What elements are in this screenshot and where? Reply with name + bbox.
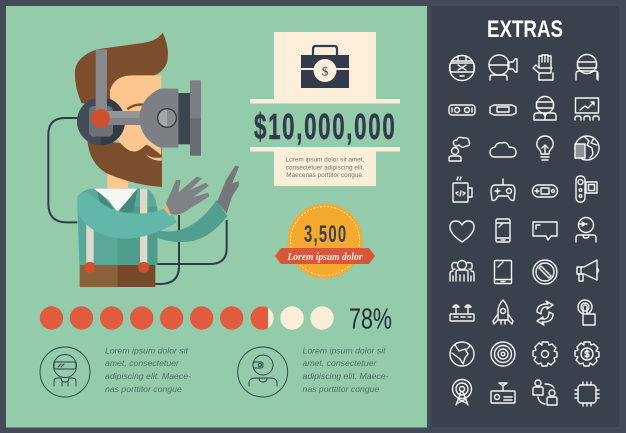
badge: 3,500 bbox=[275, 204, 375, 278]
icon: globe bbox=[450, 342, 474, 366]
badge: 3,500: Lorem ipsum dolor bbox=[287, 251, 363, 263]
icon: wifi router bbox=[450, 305, 474, 321]
icon: speech bubble bbox=[533, 222, 557, 240]
text block right: nas porttitor congue bbox=[302, 384, 379, 394]
headset strap bbox=[96, 49, 107, 116]
far glove bbox=[217, 166, 239, 213]
icon: vr head front bbox=[450, 56, 474, 80]
visor body bbox=[139, 89, 178, 148]
cream panel top bbox=[274, 32, 376, 99]
icon: person with side visor bbox=[576, 218, 596, 242]
cables bbox=[48, 118, 227, 284]
illustration: man wearing VR headset bbox=[48, 33, 239, 287]
trousers bbox=[80, 265, 117, 287]
icon: handheld console bbox=[532, 185, 558, 197]
icon: person with VR visor, side bbox=[238, 347, 288, 397]
icon: person thinking cloud bbox=[449, 137, 470, 161]
icon: visor wide bbox=[490, 105, 516, 115]
icon: globe with document bbox=[575, 136, 599, 160]
icon: game controller bbox=[491, 179, 515, 200]
heading: extras: EXTRAS bbox=[487, 16, 563, 43]
icon: person with headset bbox=[576, 54, 598, 80]
big number: $10,000,000 bbox=[254, 108, 395, 147]
percentage: 78% bbox=[349, 304, 392, 336]
caption: Maecenas porttitor congue. bbox=[286, 172, 364, 179]
shirt collar bbox=[94, 189, 137, 212]
progress dots: 78% bbox=[40, 306, 334, 330]
caption: Lorem ipsum dolor sit amet, bbox=[286, 156, 365, 164]
cream panel bottom bbox=[274, 151, 376, 186]
icon: camcorder bbox=[576, 176, 597, 202]
icon: presentation chart bbox=[575, 98, 599, 120]
icon: tablet bbox=[494, 260, 512, 284]
text block left: amet, consectetuer bbox=[105, 358, 180, 368]
arm of headset bbox=[107, 111, 143, 125]
near arm bbox=[77, 192, 177, 239]
icon: vr glove bbox=[533, 55, 553, 80]
icon: transmitter device bbox=[491, 383, 515, 403]
icon: light bulb bbox=[537, 136, 553, 160]
face bbox=[110, 75, 161, 155]
icon: touch hand bbox=[578, 300, 595, 325]
text block left: adipiscing elit. Maece- bbox=[105, 371, 191, 381]
icon: vr head side bbox=[489, 55, 517, 80]
far arm bbox=[157, 200, 227, 242]
caption bbox=[286, 156, 365, 179]
icon: smartphone bbox=[496, 219, 510, 242]
icon: code mug bbox=[453, 177, 472, 202]
icon grid bbox=[449, 54, 599, 406]
icon: briefcase: $ bbox=[322, 64, 329, 78]
icon: group of people bbox=[450, 260, 474, 281]
icon: microchip bbox=[575, 382, 599, 406]
text block right bbox=[302, 346, 389, 394]
badge: 3,500: 3,500 bbox=[304, 222, 346, 248]
icon: megaphone bbox=[577, 260, 598, 281]
text block left: Lorem ipsum dolor sit bbox=[105, 346, 189, 356]
panel: extras bbox=[431, 6, 619, 427]
panel: main infographic bbox=[6, 6, 427, 428]
ear cup bbox=[77, 97, 125, 145]
text block left bbox=[105, 346, 191, 394]
icon: rocket bbox=[493, 300, 513, 324]
icon: target bbox=[491, 342, 515, 366]
text block right: amet, consectetuer bbox=[302, 358, 377, 368]
icon: briefcase bbox=[301, 46, 349, 88]
eyebrow and mouth bbox=[127, 105, 143, 109]
block: money figure bbox=[250, 32, 400, 186]
icon: heart bbox=[450, 221, 474, 242]
icon: cloud bbox=[490, 142, 516, 157]
text block left: nas porttitor congue bbox=[105, 384, 182, 394]
near glove bbox=[166, 177, 209, 215]
icon: person with VR visor, front bbox=[40, 347, 90, 397]
text block right: adipiscing elit. Maece- bbox=[302, 371, 389, 381]
neck bbox=[107, 173, 128, 192]
caption: consectetuer adipiscing elit. bbox=[286, 164, 364, 171]
icon: no entry sign bbox=[533, 260, 557, 284]
suspender clips bbox=[85, 262, 95, 273]
suspenders bbox=[86, 220, 94, 265]
ribbon bbox=[275, 248, 375, 264]
icon: radio tower bbox=[452, 380, 472, 405]
red pivot bbox=[91, 109, 110, 128]
text block right: Lorem ipsum dolor sit bbox=[302, 346, 386, 356]
icon: money gear bbox=[575, 342, 599, 366]
icon: sync arrows bbox=[537, 301, 553, 325]
icon: gear bbox=[533, 342, 557, 366]
icon: headset wide bbox=[449, 105, 475, 115]
cream bars bbox=[250, 99, 400, 104]
torso bbox=[77, 189, 157, 265]
icon: person in visor bbox=[534, 96, 556, 120]
icon: people exchange bbox=[533, 380, 557, 405]
hair and beard bbox=[75, 33, 168, 103]
